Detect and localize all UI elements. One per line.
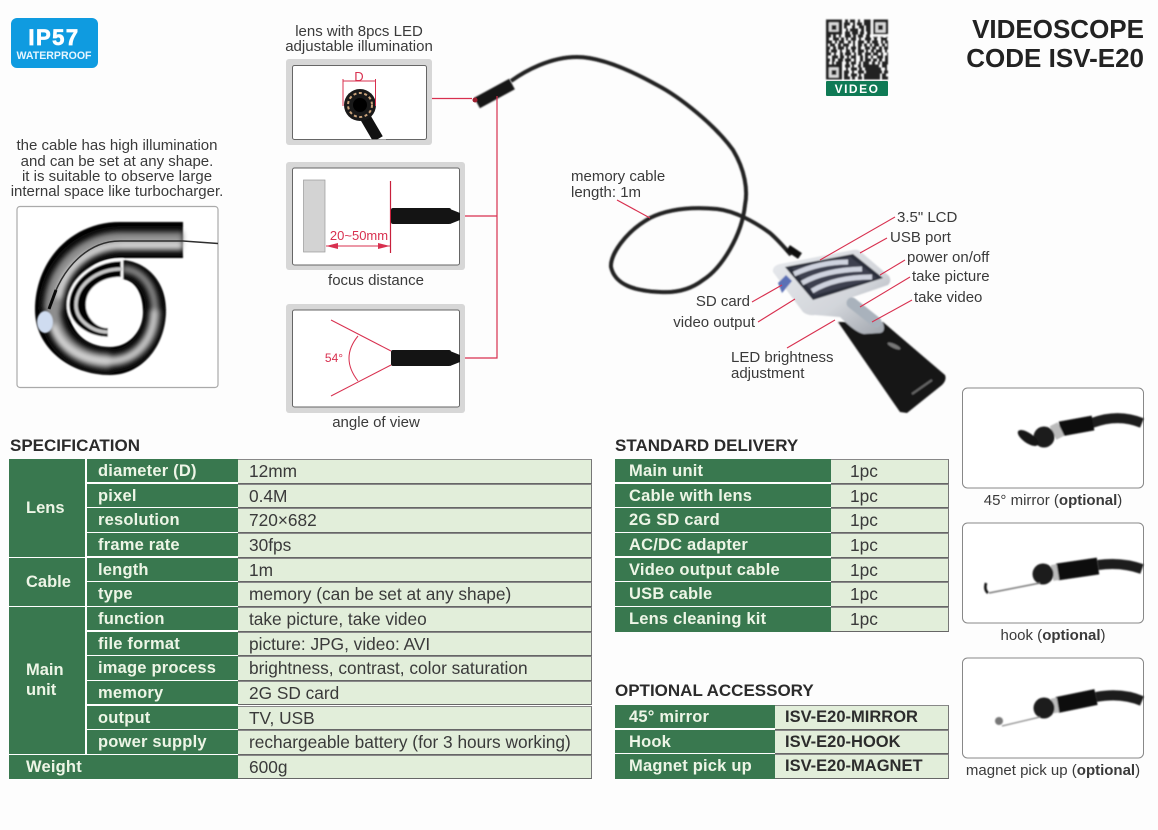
row: video output cable: 1pc xyxy=(850,560,878,580)
row: resolution: resolution xyxy=(98,511,180,529)
row: power supply: power supply xyxy=(98,733,207,751)
row: type xyxy=(87,582,592,607)
title: VIDEOSCOPE xyxy=(972,14,1144,44)
text: cable description xyxy=(11,137,223,200)
row: function: function xyxy=(98,610,165,628)
row: image process: brightness, contrast, color saturation xyxy=(249,658,528,678)
row: hook: Hook xyxy=(629,733,671,751)
caption: lens xyxy=(285,23,433,55)
panel: angle of view xyxy=(286,304,465,413)
group: cable: Cable xyxy=(26,573,71,591)
row: memory xyxy=(87,681,592,705)
row: weight: 600g xyxy=(249,757,287,777)
row: video output cable xyxy=(615,558,949,582)
row: cable with lens: 1pc xyxy=(850,486,878,506)
caption: magnet: magnet pick up (optional) xyxy=(966,762,1140,779)
row: pixel xyxy=(87,484,592,508)
row: power supply xyxy=(87,730,592,755)
callouts: scope parts: USB port xyxy=(890,229,952,246)
callouts: scope parts: take picture xyxy=(912,268,990,285)
row: mirror: ISV-E20-MIRROR xyxy=(785,708,918,726)
table: specification xyxy=(9,459,592,780)
row: frame rate: frame rate xyxy=(98,536,180,554)
row: magnet pick up: ISV-E20-MAGNET xyxy=(785,757,923,775)
videoscope unit xyxy=(773,248,946,413)
row: output: TV, USB xyxy=(249,708,315,728)
panel: focus distance xyxy=(286,162,465,270)
heading: standard delivery: STANDARD DELIVERY xyxy=(615,436,798,455)
row: weight xyxy=(9,755,592,779)
caption: angle of view: angle of view xyxy=(332,414,420,431)
table: standard delivery xyxy=(615,459,948,632)
row: pixel: 0.4M xyxy=(249,486,287,506)
row: adapter: 1pc xyxy=(850,535,878,555)
row: diameter: 12mm xyxy=(249,461,297,481)
row: main unit: Main unit xyxy=(629,462,703,480)
row: type: type xyxy=(98,585,133,603)
group: lens xyxy=(9,459,85,557)
row: function xyxy=(87,607,592,632)
row: lens cleaning kit: 1pc xyxy=(850,609,878,629)
text: cable description: it is suitable to observe large xyxy=(22,168,212,185)
row: weight: Weight xyxy=(26,758,82,776)
lens head xyxy=(472,84,512,103)
row: lens cleaning kit xyxy=(615,607,949,632)
row: memory: 2G SD card xyxy=(249,683,339,703)
row: resolution xyxy=(87,508,592,533)
row: memory: memory xyxy=(98,684,163,702)
panel: lens front view xyxy=(286,59,432,145)
callouts: scope parts: LED brightness xyxy=(731,349,834,366)
group: main unit xyxy=(9,607,85,754)
row: cable with lens: Cable with lens xyxy=(629,487,752,505)
row: resolution: 720×682 xyxy=(249,510,317,530)
row: mirror xyxy=(615,705,949,730)
accessory photo: magnet pick up xyxy=(962,658,1144,758)
row: mirror: 45° mirror xyxy=(629,708,709,726)
panel: focus distance: 20~50mm xyxy=(330,228,388,243)
title: CODE ISV-E20 xyxy=(966,43,1144,73)
panel: angle of view: 54° xyxy=(325,351,343,365)
caption: lens: lens with 8pcs LED xyxy=(295,23,423,40)
row: image process xyxy=(87,656,592,681)
group: main unit: unit xyxy=(26,681,56,699)
group: main unit: Main xyxy=(26,661,64,679)
callouts: scope parts: memory cable xyxy=(571,168,665,185)
connector lines xyxy=(432,96,497,358)
row: frame rate: 30fps xyxy=(249,535,291,555)
accessory photo: 45 degree mirror xyxy=(962,388,1144,488)
callouts: scope parts: power on/off xyxy=(907,249,990,266)
row: main unit xyxy=(615,459,949,484)
row: file format: picture: JPG, video: AVI xyxy=(249,634,430,654)
row: USB cable: 1pc xyxy=(850,584,878,604)
row: adapter xyxy=(615,533,949,558)
row: file format xyxy=(87,632,592,656)
callouts: scope parts: adjustment xyxy=(731,365,805,382)
accessory photo: hook xyxy=(962,523,1144,623)
row: hook: ISV-E20-HOOK xyxy=(785,733,901,751)
callouts: scope parts: length: 1m xyxy=(571,184,641,201)
text: cable description: and can be set at any shape. xyxy=(21,153,213,170)
row: SD card: 1pc xyxy=(850,510,878,530)
row: video output cable: Video output cable xyxy=(629,561,780,579)
row: USB cable: USB cable xyxy=(629,585,712,603)
text: cable description: internal space like turbocharger. xyxy=(11,183,223,200)
caption: lens: adjustable illumination xyxy=(285,38,433,55)
videoscope cable xyxy=(511,57,791,292)
QR code with video tag xyxy=(826,20,888,96)
badge: IP57 waterproof: WATERPROOF xyxy=(16,50,92,62)
group: lens: Lens xyxy=(26,499,65,517)
badge: IP57 waterproof: IP57 xyxy=(28,25,80,50)
row: SD card: 2G SD card xyxy=(629,511,720,529)
callouts: scope parts: SD card xyxy=(696,293,750,310)
title xyxy=(966,14,1144,73)
heading: optional accessory: OPTIONAL ACCESSORY xyxy=(615,681,814,700)
row: cable with lens xyxy=(615,484,949,508)
text: cable description: the cable has high illumination xyxy=(17,137,217,154)
badge: IP57 waterproof xyxy=(11,18,98,68)
row: pixel: pixel xyxy=(98,487,137,505)
panel: coiled cable turbocharger illustration xyxy=(17,206,218,388)
row: power supply: rechargeable battery (for 3 hours working) xyxy=(249,732,571,752)
table: optional accessory xyxy=(615,705,948,780)
panel: lens front view: D xyxy=(354,69,364,84)
callouts: scope parts: take video xyxy=(914,289,982,306)
row: hook xyxy=(615,730,949,754)
row: diameter: diameter (D) xyxy=(98,462,197,480)
row: USB cable xyxy=(615,582,949,607)
row: length: 1m xyxy=(249,560,273,580)
row: output: output xyxy=(98,708,151,726)
row: frame rate xyxy=(87,533,592,558)
row: lens cleaning kit: Lens cleaning kit xyxy=(629,610,766,628)
row: magnet pick up: Magnet pick up xyxy=(629,757,752,775)
row: main unit: 1pc xyxy=(850,461,878,481)
row: output xyxy=(87,706,592,730)
row: adapter: AC/DC adapter xyxy=(629,536,748,554)
row: function: take picture, take video xyxy=(249,609,427,629)
heading: specification: SPECIFICATION xyxy=(10,436,140,455)
callouts: scope parts: 3.5" LCD xyxy=(897,209,958,226)
caption: hook: hook (optional) xyxy=(1000,627,1106,644)
callouts: scope parts xyxy=(571,168,990,382)
row: diameter xyxy=(87,459,592,484)
QR code with video tag: VIDEO xyxy=(835,82,879,96)
caption: focus distance: focus distance xyxy=(328,272,424,289)
row: image process: image process xyxy=(98,659,216,677)
row: length: length xyxy=(98,561,149,579)
row: file format: file format xyxy=(98,635,180,653)
group: cable xyxy=(9,558,85,606)
row: length xyxy=(87,558,592,582)
caption: mirror: 45° mirror (optional) xyxy=(984,492,1122,509)
callouts: scope parts: video output xyxy=(673,314,756,331)
row: magnet pick up xyxy=(615,754,949,779)
row: SD card xyxy=(615,508,949,533)
row: type: memory (can be set at any shape) xyxy=(249,584,511,604)
